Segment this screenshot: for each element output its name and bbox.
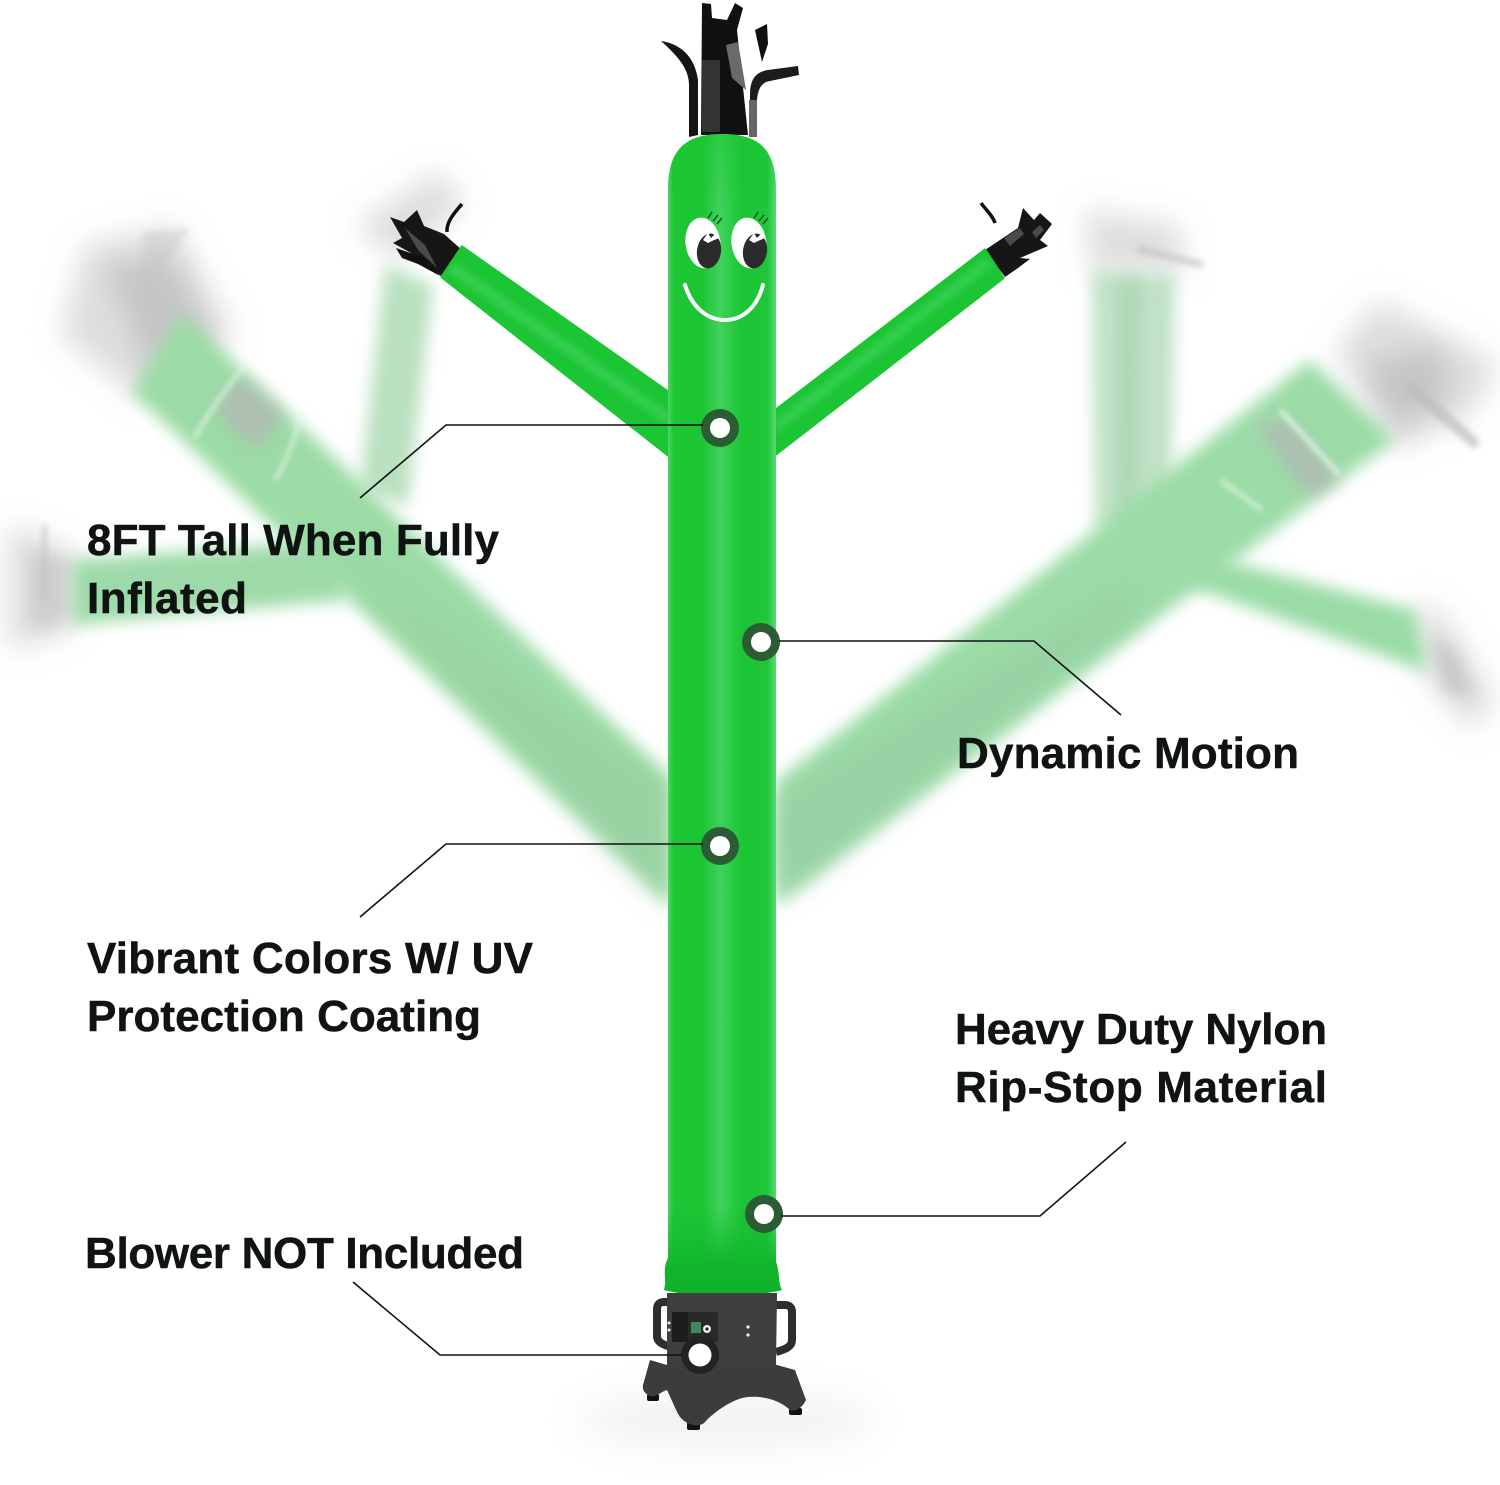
label: height xyxy=(87,516,500,623)
icon: right arm tassel xyxy=(981,203,1052,277)
icon: left arm tassel xyxy=(390,204,462,277)
right eye xyxy=(728,212,770,271)
label: material xyxy=(955,1005,1327,1112)
icon: top tassel xyxy=(661,3,799,137)
label: material: Heavy Duty Nylon xyxy=(955,1005,1327,1054)
leader line: blower xyxy=(353,1282,682,1355)
green tube body xyxy=(664,134,782,1296)
callout dot: vibrant colors xyxy=(701,827,739,865)
blower foot xyxy=(643,1360,806,1425)
left eye xyxy=(682,212,724,271)
label: vibrant colors xyxy=(87,934,534,1041)
label: vibrant colors: Protection Coating xyxy=(87,992,481,1041)
label: height: 8FT Tall When Fully xyxy=(87,516,500,565)
callout dot: material xyxy=(745,1195,783,1233)
callout dot: blower xyxy=(681,1336,719,1374)
callout dot: dynamic motion xyxy=(742,623,780,661)
label: dynamic motion: Dynamic Motion xyxy=(957,729,1299,778)
motion blur ghost: left swing xyxy=(8,170,672,908)
motion blur ghost: right swing xyxy=(776,210,1500,905)
label: material: Rip-Stop Material xyxy=(955,1063,1327,1112)
blower legs xyxy=(647,1394,802,1430)
leader line: height xyxy=(360,425,703,498)
label: height: Inflated xyxy=(87,574,247,623)
blower handles xyxy=(657,1302,792,1352)
blower body xyxy=(667,1293,777,1365)
label: blower: Blower NOT Included xyxy=(85,1229,524,1278)
label: vibrant colors: Vibrant Colors W/ UV xyxy=(87,934,534,983)
ground shadow xyxy=(575,1392,875,1448)
control panel xyxy=(668,1312,750,1342)
blower base xyxy=(643,1293,806,1430)
face: eyes and smile xyxy=(682,212,770,320)
left arm xyxy=(442,247,668,455)
smile xyxy=(685,285,763,320)
callout dot: height xyxy=(701,409,739,447)
leader line: dynamic motion xyxy=(779,641,1121,715)
right arm xyxy=(776,250,1003,454)
leader line: material xyxy=(781,1142,1126,1216)
leader line: vibrant colors xyxy=(360,844,703,917)
